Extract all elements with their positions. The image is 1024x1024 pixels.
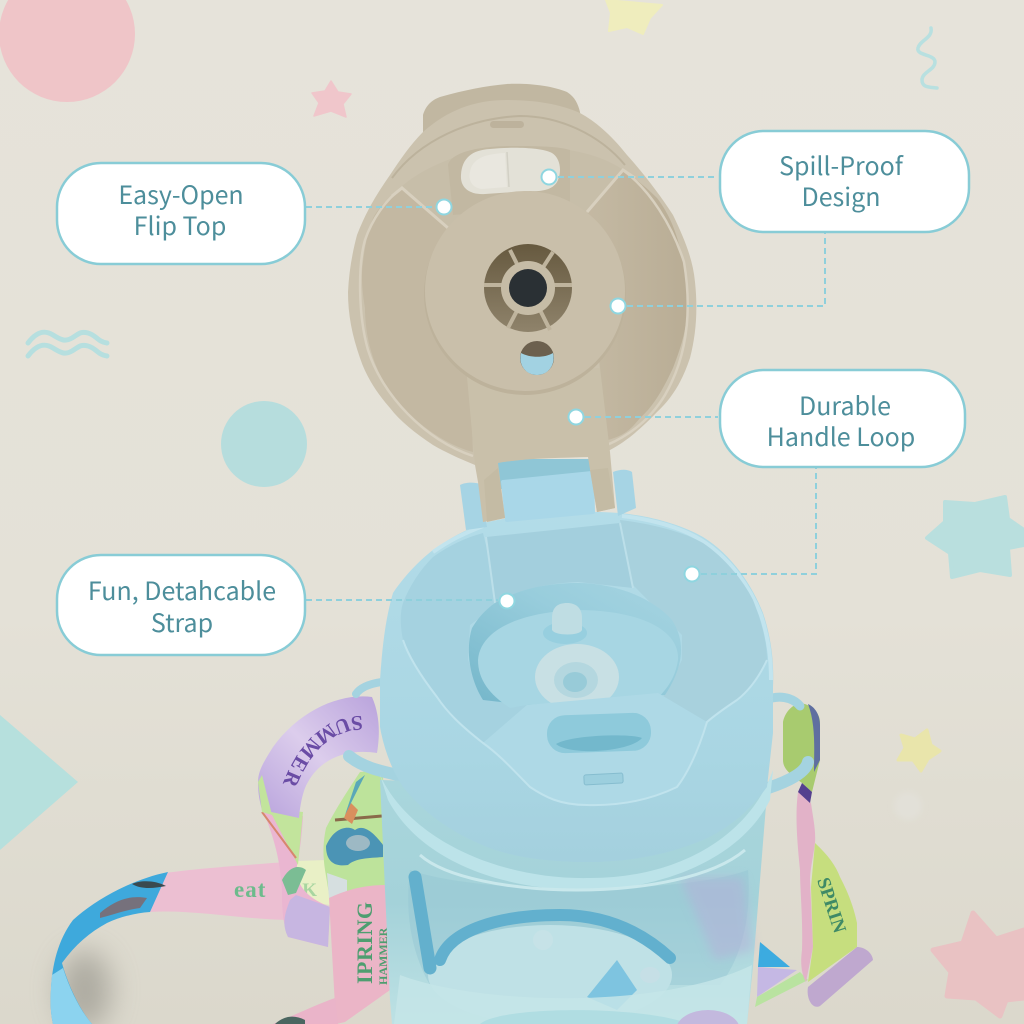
strap shadow <box>59 950 111 1024</box>
callout: Easy-Open Flip Top: Easy-Open <box>118 176 244 212</box>
right strap: SPRIN <box>812 875 850 936</box>
lid disc <box>348 100 696 465</box>
callout: Durable Handle Loop: Durable <box>799 387 891 423</box>
flap recess panel <box>486 523 633 603</box>
silicone plug <box>461 148 560 194</box>
callout: Spill-Proof Design <box>720 131 969 232</box>
left strap <box>50 696 390 1024</box>
band text <box>234 877 318 902</box>
left strap: IPRING <box>352 902 377 984</box>
callout: Easy-Open Flip Top <box>57 163 305 264</box>
silicone spout <box>543 603 587 644</box>
callout dots <box>436 170 700 608</box>
vent ring <box>484 244 572 332</box>
leader lines <box>306 177 825 600</box>
left top face <box>401 533 527 743</box>
interior upper band <box>402 146 623 228</box>
arm <box>467 368 615 522</box>
small slot <box>490 121 524 128</box>
right strap <box>755 703 873 1007</box>
bottle collar <box>380 770 773 890</box>
left strap: SUMMER <box>282 716 362 786</box>
horizontal band <box>150 861 300 920</box>
blue lid <box>380 512 773 862</box>
left panel <box>362 188 473 452</box>
callout: Spill-Proof Design: Spill-Proof <box>779 147 904 183</box>
callout: Durable Handle Loop: Handle Loop <box>767 418 915 454</box>
flip lid <box>348 84 696 522</box>
left strap: HAMMER <box>376 927 390 985</box>
lid skirt <box>380 512 773 862</box>
front strip <box>262 808 330 947</box>
drinking slot <box>546 712 652 754</box>
right panel <box>587 170 687 440</box>
centre recess <box>469 583 681 705</box>
band text: lK <box>296 880 318 901</box>
bottle body <box>380 780 767 1024</box>
left and right handle loops <box>349 682 808 792</box>
lid front ledge <box>483 693 707 805</box>
band text: eat <box>234 877 266 902</box>
small vent <box>584 773 623 785</box>
callout: Fun, Detahcable Strap: Fun, Detahcable <box>88 572 276 608</box>
callout: Fun, Detahcable Strap: Strap <box>151 604 213 640</box>
rim highlight <box>433 516 771 680</box>
callout: Durable Handle Loop <box>720 370 965 467</box>
blue hinge <box>460 459 636 530</box>
callout: Spill-Proof Design: Design <box>802 178 880 214</box>
purple loop <box>258 696 379 818</box>
top tab <box>423 84 582 135</box>
silicone washer <box>535 644 619 710</box>
silicone plug frame <box>448 146 570 215</box>
centre disc <box>424 191 626 395</box>
callout: Fun, Detahcable Strap <box>57 555 305 655</box>
small hole <box>520 341 554 375</box>
rim ridge lines <box>360 170 688 456</box>
callout: Easy-Open Flip Top: Flip Top <box>134 207 226 243</box>
back strip <box>323 770 385 900</box>
right top face <box>620 520 767 722</box>
lid wave edge <box>403 640 767 805</box>
